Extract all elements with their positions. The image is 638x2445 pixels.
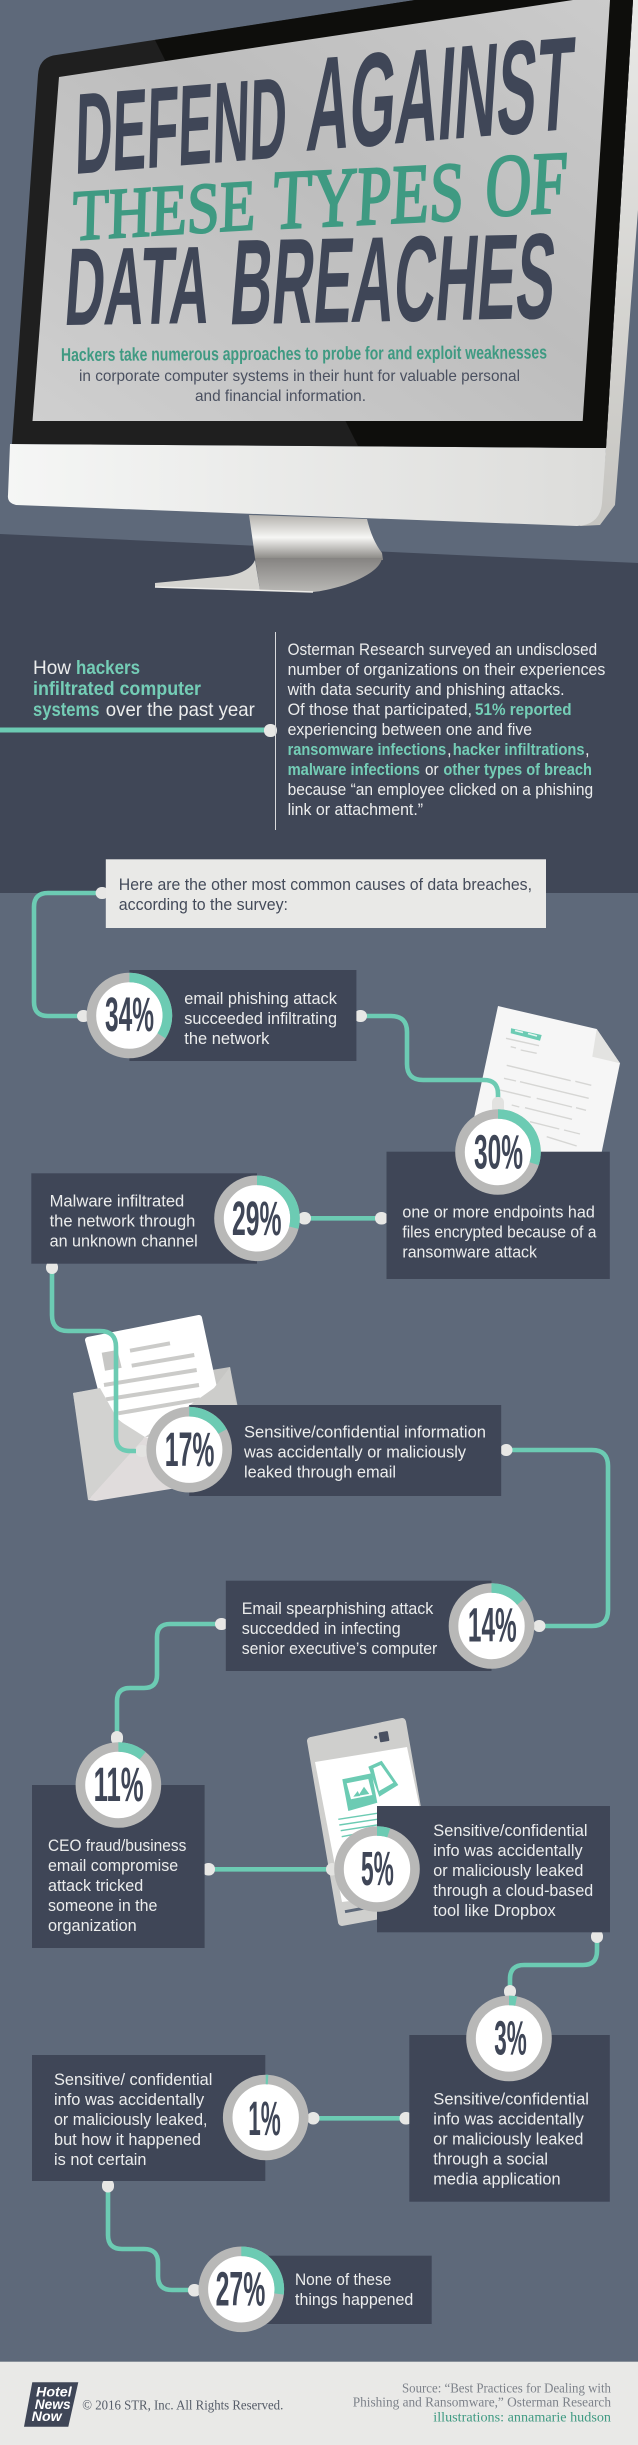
- stat: 34%: succeeded infiltrating: [184, 1010, 337, 1028]
- monitor screen: [32, 0, 610, 421]
- intro heading: how hackers infiltrated: over the past year: [106, 699, 255, 721]
- intro paragraph: number of organizations on their experiences: [288, 661, 605, 679]
- stat: 11%: someone in the: [48, 1897, 157, 1915]
- stat: 1%: info was accidentally: [54, 2091, 205, 2109]
- stat: 34%: email phishing attack: [184, 990, 338, 1008]
- stat: 3%: 3%: [494, 2012, 527, 2065]
- intro paragraph: Osterman Research surveyed an undisclosed: [288, 641, 597, 659]
- stat: 27%: things happened: [295, 2291, 413, 2309]
- stat: 1%: or maliciously leaked,: [54, 2111, 208, 2129]
- stat: 3%: [409, 2000, 610, 2202]
- stat: 30%: 30%: [474, 1126, 523, 1179]
- stat: 1%: Sensitive/ confidential: [54, 2071, 212, 2089]
- title: THESE: [72, 165, 257, 256]
- stat: 1%: is not certain: [54, 2151, 146, 2169]
- callout: other common causes: according to the survey:: [119, 896, 288, 914]
- monitor frame: [8, 0, 638, 526]
- intro connector: [0, 632, 277, 830]
- copyright: © 2016 STR, Inc. All Rights Reserved.: [82, 2398, 283, 2413]
- stat: 3%: info was accidentally: [433, 2110, 585, 2128]
- callout: other common causes: [106, 859, 546, 928]
- intro paragraph: other types of breach: [443, 761, 592, 779]
- stat: 5%: [339, 1806, 610, 1932]
- intro paragraph: or: [425, 761, 439, 779]
- stat: 5%: Sensitive/confidential: [433, 1822, 588, 1840]
- stat: 34%: [91, 970, 356, 1061]
- stat: 3%: or maliciously leaked: [433, 2130, 583, 2148]
- stat: 27%: 27%: [216, 2264, 265, 2317]
- stat: 14%: [226, 1581, 530, 1671]
- stat: 17%: 17%: [165, 1424, 214, 1477]
- subtitle: and financial information.: [195, 388, 366, 405]
- title: BREACHES: [226, 209, 561, 351]
- stat: 3%: media application: [433, 2170, 561, 2188]
- intro heading: how hackers infiltrated: systems: [33, 699, 100, 721]
- title: AGAINST: [303, 8, 578, 179]
- intro paragraph: experiencing between one and five: [288, 721, 532, 739]
- stat: 5%: info was accidentally: [433, 1842, 583, 1860]
- source credits: Source: “Best Practices for Dealing with: [402, 2382, 611, 2397]
- icon: smartphone: [311, 1722, 437, 1922]
- intro paragraph: malware infections: [288, 761, 420, 779]
- subtitle: [61, 341, 547, 405]
- stat: 27%: [203, 2251, 432, 2327]
- stat: 5%: through a cloud-based: [433, 1882, 593, 1900]
- stat: 14%: 14%: [468, 1600, 517, 1653]
- logo: Hotel News Now: Now: [32, 2408, 63, 2424]
- subtitle: in corporate computer systems in their hunt for valuable personal: [79, 368, 520, 385]
- stat: 27%: None of these: [295, 2271, 391, 2289]
- intro heading: how hackers infiltrated: hackers: [76, 657, 140, 679]
- title: OF: [483, 134, 569, 236]
- stat: 30%: one or more endpoints had: [402, 1204, 595, 1222]
- source credits: Phishing and Ransomware,” Osterman Research: [353, 2396, 611, 2411]
- stat: 11%: organization: [48, 1917, 137, 1935]
- stat: 17%: leaked through email: [244, 1464, 396, 1482]
- intro paragraph: ,: [447, 741, 452, 759]
- footer: [0, 2362, 638, 2445]
- stat: 5%: tool like Dropbox: [433, 1902, 556, 1920]
- stat: 1%: [32, 2055, 304, 2181]
- stat: 14%: senior executive’s computer: [242, 1640, 438, 1658]
- stat: 11%: CEO fraud/business: [48, 1837, 186, 1855]
- stat: 17%: [151, 1405, 501, 1496]
- title: TYPES: [271, 144, 467, 247]
- stat: 1%: 1%: [248, 2093, 281, 2146]
- intro paragraph: ransomware infections: [288, 741, 446, 759]
- connector lines: [34, 887, 608, 2296]
- stat: 5%: or maliciously leaked: [433, 1862, 583, 1880]
- intro heading: how hackers infiltrated: infiltrated computer: [33, 678, 201, 700]
- callout: other common causes: Here are the other most common causes of data breaches,: [119, 876, 532, 894]
- title: DEFEND: [74, 52, 289, 199]
- source credits: [353, 2382, 611, 2426]
- intro paragraph: [287, 641, 605, 819]
- stat: 5%: 5%: [361, 1843, 394, 1896]
- stat: 30%: ransomware attack: [402, 1244, 538, 1262]
- stat: 29%: [31, 1173, 295, 1264]
- logo: Hotel News Now: Hotel: [36, 2384, 73, 2400]
- intro heading: how hackers infiltrated: How: [33, 657, 72, 679]
- stat: 1%: but how it happened: [54, 2131, 201, 2149]
- stat: 29%: Malware infiltrated: [50, 1193, 184, 1211]
- stat: 3%: through a social: [433, 2150, 548, 2168]
- intro heading: how hackers infiltrated: [33, 657, 255, 721]
- stat: 29%: the network through: [50, 1213, 195, 1231]
- icon: envelope: [73, 1318, 250, 1501]
- stat: 29%: an unknown channel: [50, 1233, 198, 1251]
- stat: 11%: email compromise: [48, 1857, 178, 1875]
- monitor illustration with title: [8, 0, 638, 592]
- stat: 30%: [386, 1114, 610, 1279]
- monitor stand: [155, 515, 383, 592]
- stat: 34%: the network: [184, 1030, 270, 1048]
- logo: Hotel News Now: News: [35, 2396, 71, 2412]
- intro paragraph: link or attachment.”: [288, 801, 423, 819]
- stat: 11%: [32, 1747, 205, 1948]
- title: [61, 8, 578, 351]
- intro paragraph: ,: [585, 741, 590, 759]
- stat: 34%: 34%: [105, 989, 154, 1042]
- stat: 14%: Email spearphishing attack: [242, 1600, 434, 1618]
- stat: 30%: files encrypted because of a: [402, 1224, 597, 1242]
- intro paragraph: Of those that participated,: [288, 701, 472, 719]
- intro paragraph: because “an employee clicked on a phishing: [288, 781, 593, 799]
- stat: 17%: Sensitive/confidential information: [244, 1424, 486, 1442]
- stat: 29%: 29%: [232, 1193, 282, 1246]
- stat: 11%: attack tricked: [48, 1877, 143, 1895]
- intro paragraph: hacker infiltrations: [453, 741, 585, 759]
- stat: 3%: Sensitive/confidential: [433, 2090, 589, 2108]
- source credits: illustrations: annamarie hudson: [433, 2411, 611, 2426]
- stat: 14%: succedded in infecting: [242, 1620, 401, 1638]
- logo: Hotel News Now: [24, 2382, 78, 2427]
- title: DATA: [61, 225, 215, 349]
- intro paragraph: with data security and phishing attacks.: [287, 681, 565, 699]
- stat: 17%: was accidentally or maliciously: [243, 1444, 467, 1462]
- icon: document: [467, 1006, 620, 1152]
- stat: 11%: 11%: [94, 1759, 144, 1812]
- intro paragraph: 51% reported: [475, 701, 572, 719]
